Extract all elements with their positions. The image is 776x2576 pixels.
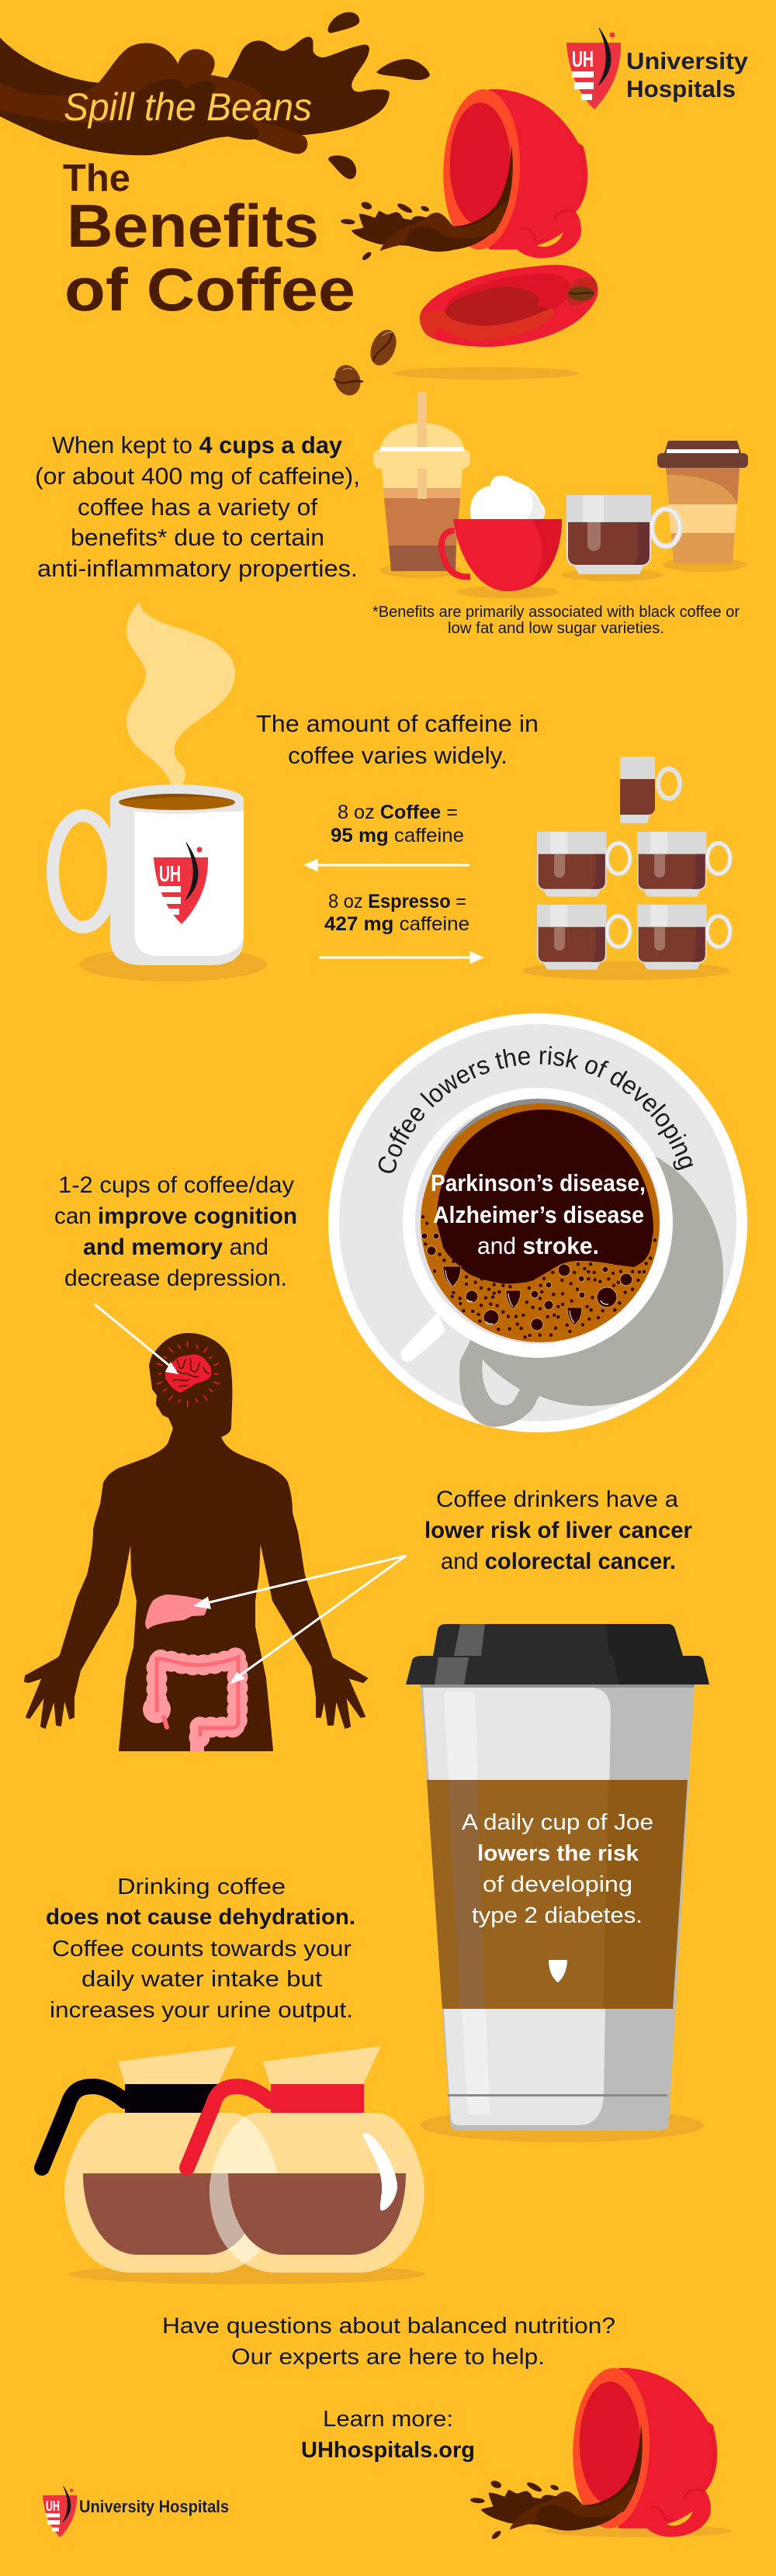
text: cognition and memory: and memory and [83,1234,268,1260]
text: 4 cups a day [35,431,360,582]
sleeve text [462,1810,653,1928]
title: of Coffee [64,255,355,324]
icon: espresso cups [522,757,730,980]
text: dehydration: Drinking coffee [117,1875,286,1899]
logo: University Hospitals: UH [572,47,594,72]
text: call to action: Our experts are here to help. [231,2345,545,2370]
arrow: to brain [95,1304,176,1373]
icon: glass mug [561,495,680,581]
text: lower cancer risk: lower risk of liver cancer [424,1518,692,1543]
icon: bottom spilled cup [470,2367,732,2540]
curved text: Coffee lowers the risk of developing [379,1046,694,1173]
icon: spilled red cup [341,88,587,261]
text: call to action [162,2314,615,2463]
logo: footer University Hospitals: UH [46,2498,60,2514]
icon: whipped cream red cup [442,476,562,598]
arrow: to colon [232,1556,406,1682]
logo: footer University Hospitals [43,2486,229,2537]
footnote [372,604,740,637]
coffee splash behind heading [0,12,430,179]
text: lower cancer risk [424,1487,692,1574]
text: lower cancer risk: and colorectal cancer. [441,1549,676,1574]
disease text: and stroke. [477,1232,599,1259]
icon: takeaway cup with sleeve [657,441,748,572]
icon: iced coffee [373,392,470,578]
title: The [63,158,130,199]
disease text [431,1169,646,1259]
logo: footer University Hospitals: University Hospitals [79,2497,229,2516]
icon: UH branded mug: UH [159,862,181,887]
sleeve text: of developing [483,1872,632,1897]
sleeve text: lowers the risk [477,1841,639,1866]
arrow: to espresso cups [319,953,481,962]
icon: red brain [157,1341,220,1407]
sleeve text: type 2 diabetes. [472,1903,643,1928]
text: call to action: Learn more: [323,2407,453,2432]
arrow: to mug [307,860,469,870]
text: 4 cups a day: (or about 400 mg of caffeine), [35,462,360,490]
text: call to action: Have questions about balanced nutrition? [162,2314,615,2339]
text: cognition and memory [54,1172,297,1291]
panel: takeaway cup [406,1624,709,2142]
text: 8 oz espresso: 427 mg caffeine [324,913,469,935]
text: 4 cups a day: benefits* due to certain [71,524,324,551]
coffee surface [421,1103,660,1342]
text: caffeine varies: coffee varies widely. [288,742,508,769]
icon: coffee carafes [42,2046,426,2284]
text: 8 oz coffee: 8 oz Coffee = [338,802,458,823]
text: dehydration [46,1875,355,2023]
cup handle [401,1312,445,1362]
text: dehydration: Coffee counts towards your [52,1937,352,1961]
text: cognition and memory: decrease depression. [64,1265,287,1291]
text: dehydration: increases your urine output. [50,1998,353,2023]
text: dehydration: daily water intake but [81,1967,322,1992]
text: 8 oz coffee [331,802,464,847]
icon: UH branded mug [53,784,267,982]
text: dehydration: does not cause dehydration. [46,1905,355,1930]
footnote: low fat and low sugar varieties. [448,620,664,637]
disease text: Alzheimer’s disease [433,1201,644,1228]
logo: University Hospitals: Hospitals [626,75,736,102]
sleeve text: A daily cup of Joe [462,1810,653,1835]
logo: University Hospitals [566,28,749,109]
icon: falling saucer with bean [420,265,598,347]
panel: top-down coffee cup on saucer [328,1013,747,1432]
text: 4 cups a day: anti-inflammatory properties. [37,555,358,582]
logo: University Hospitals: University [626,47,749,74]
tagline: Spill the Beans: Spill the Beans [64,85,312,129]
text: 4 cups a day: When kept to 4 cups a day [52,431,343,459]
text: 8 oz coffee: 95 mg caffeine [331,825,464,847]
text: 8 oz espresso: 8 oz Espresso = [328,891,466,912]
icon: liver [145,1594,207,1629]
title [63,158,355,324]
icon: coffee bean [331,362,365,399]
icon: falling saucer shadow [393,367,579,379]
arrow: to liver [196,1556,406,1608]
text: call to action: UHhospitals.org [301,2438,475,2463]
icon: coffee bean [365,326,401,369]
icon: human body silhouette [25,1334,367,1750]
text: caffeine varies: The amount of caffeine in [256,710,539,737]
cup shadow [456,1139,723,1427]
text: lower cancer risk: Coffee drinkers have a [436,1487,678,1512]
text: 8 oz espresso [324,891,469,935]
text: cognition and memory: can improve cognition [54,1203,297,1229]
disease text: Parkinson’s disease, [431,1169,646,1196]
sleeve shield [549,1960,567,1982]
icon: colon [143,1657,238,1751]
icon: steam [126,602,235,792]
footnote: *Benefits are primarily associated with black coffee or [372,604,740,621]
text: 4 cups a day: coffee has a variety of [78,493,317,521]
cup lid [406,1624,709,1684]
title: Benefits [67,192,319,260]
text: cognition and memory: 1-2 cups of coffee/day [58,1172,294,1198]
text: caffeine varies [256,710,539,769]
